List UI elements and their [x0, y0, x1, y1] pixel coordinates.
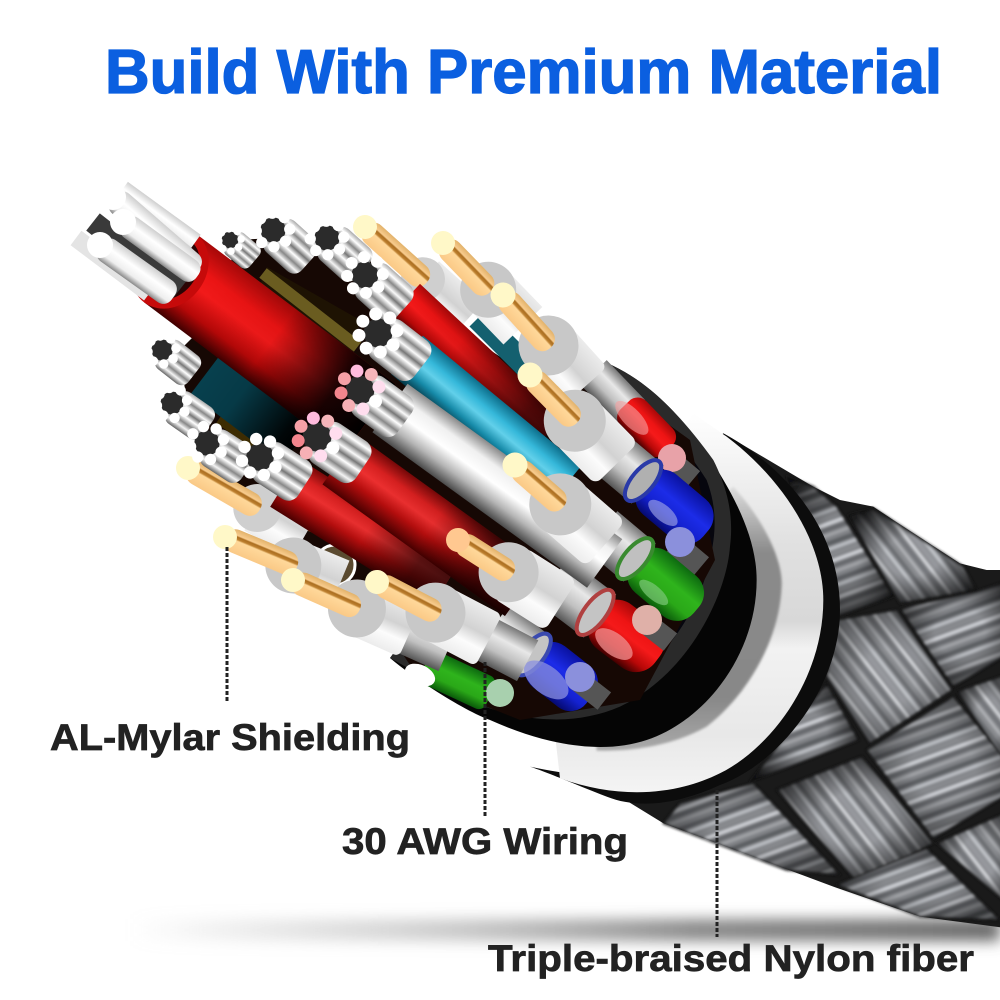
- sheath base: [620, 433, 1000, 930]
- olive strip: [259, 268, 361, 352]
- green tube lower: [417, 649, 498, 712]
- white collar and black end cap: [390, 363, 840, 804]
- pink core dot: [658, 444, 700, 488]
- pin four: [485, 433, 626, 567]
- big red tube with silver conductors: [71, 182, 396, 453]
- silver conductor one: [104, 187, 206, 280]
- gray bevel: [587, 487, 782, 751]
- callout leader: AL-Mylar Shielding: [226, 547, 228, 702]
- pin two: [472, 266, 608, 406]
- green core dot: [486, 679, 514, 707]
- periwinkle core dot: [665, 527, 709, 576]
- ground shadow: [130, 919, 1000, 941]
- long coloured wires: [270, 284, 622, 616]
- teal back tube: [470, 310, 564, 404]
- back wires: [165, 201, 564, 585]
- weave tiles: [663, 477, 1000, 920]
- white collar: [553, 413, 823, 792]
- stranded conductor ends: [136, 198, 437, 506]
- white conductor tips: [87, 184, 136, 258]
- black end cap: [390, 363, 757, 747]
- gold pins with white insulators: [203, 215, 639, 687]
- dark conductor: [86, 213, 186, 298]
- blue tube lower: [479, 604, 606, 719]
- silver flute: [116, 182, 201, 251]
- periwinkle lower core dot: [565, 662, 611, 710]
- pin one: [415, 215, 543, 345]
- pin six: [352, 550, 542, 687]
- olive filler: [258, 267, 360, 360]
- silver conductor two: [116, 212, 204, 286]
- title: Build With Premium Material: [105, 38, 942, 107]
- callout leader: Triple-braised Nylon fiber: [716, 790, 718, 937]
- pin eight: [203, 507, 350, 611]
- cyan wire: [391, 336, 581, 505]
- blue tube top: [593, 432, 723, 553]
- inner ring: [390, 363, 731, 719]
- pin nine: [165, 439, 318, 558]
- pin seven: [270, 549, 460, 676]
- label: AL-Mylar Shielding: AL-Mylar Shielding: [50, 717, 410, 758]
- red wire lower: [270, 459, 461, 607]
- silver conductor three: [92, 234, 181, 308]
- callout leader: 30 AWG Wiring: [484, 662, 486, 816]
- inner conductors near the cap: [401, 360, 723, 719]
- dark bundle interior: [180, 235, 715, 720]
- teal tube: [191, 356, 311, 463]
- label: 30 AWG Wiring: 30 AWG Wiring: [342, 821, 628, 862]
- red tube middle: [535, 558, 674, 682]
- green tube: [585, 510, 713, 630]
- pin three: [499, 344, 639, 485]
- white stub: [401, 659, 439, 691]
- interior: [390, 377, 715, 700]
- red wire upper: [390, 284, 563, 449]
- label: Triple-braised Nylon fiber: Triple-braised Nylon fiber: [488, 938, 974, 979]
- red wire middle: [322, 436, 540, 616]
- outer black crescent: [530, 433, 840, 804]
- left silver flute: [71, 231, 155, 301]
- dark olive tube: [216, 397, 284, 457]
- silver wire: [372, 384, 622, 588]
- pin five: [432, 508, 577, 631]
- pink green core dot: [632, 605, 677, 651]
- braided nylon sheath: [620, 433, 1000, 930]
- red tube body: [115, 212, 396, 453]
- gold strip: [253, 497, 420, 574]
- hollow stub: [315, 545, 355, 585]
- pin ten: [340, 201, 484, 337]
- red tube top: [581, 360, 681, 462]
